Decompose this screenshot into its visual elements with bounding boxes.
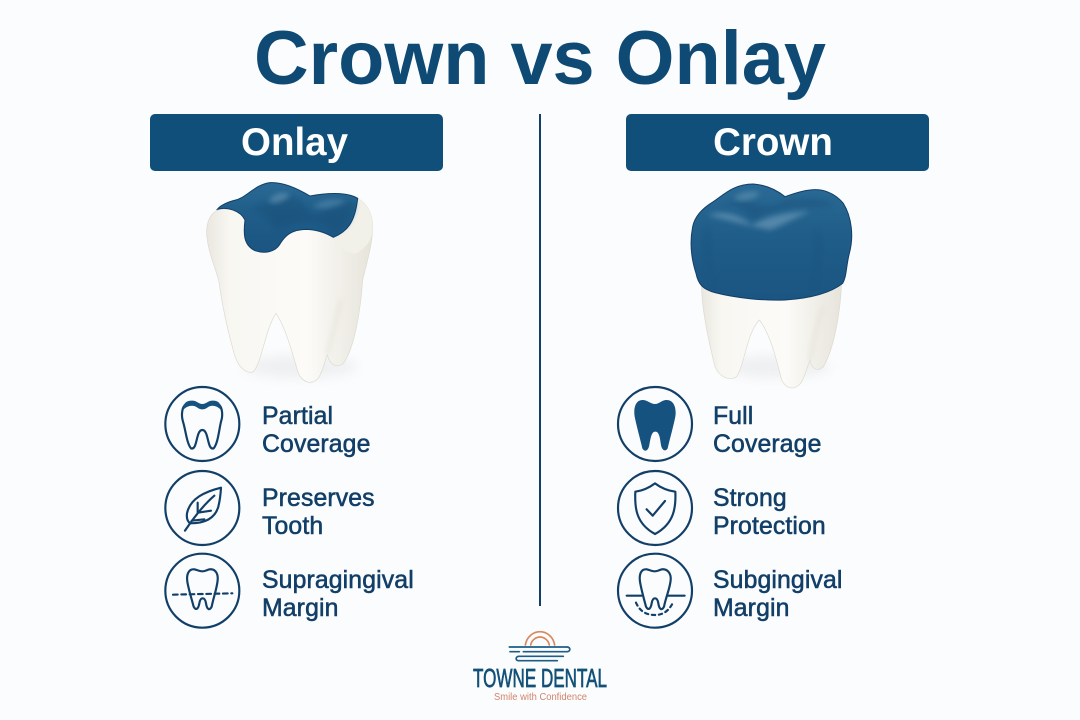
label: Strong: [713, 485, 787, 512]
feature: supragingival margin: [165, 554, 414, 628]
label: Margin: [262, 595, 339, 622]
label: Supragingival: [262, 567, 414, 594]
heading: crown: Crown: [713, 121, 833, 164]
label: Subgingival: [713, 567, 843, 594]
icon: tooth with gum line: [618, 554, 692, 628]
label: Coverage: [713, 431, 821, 458]
panel: onlay: [150, 114, 443, 628]
label: Protection: [713, 513, 826, 540]
divider: [539, 114, 541, 606]
tagline: Smile with Confidence: [494, 691, 587, 703]
heading: onlay: Onlay: [241, 121, 349, 164]
illustration: tooth with onlay: [207, 183, 373, 382]
icon: tooth above dashed margin: [165, 554, 239, 628]
label: Preserves: [262, 485, 375, 512]
feature: subgingival margin: [618, 554, 843, 628]
icon: partial coverage tooth: [165, 387, 239, 461]
icon: shield with check: [618, 471, 692, 545]
icon: leaf: [165, 471, 239, 545]
heading: onlay: [150, 114, 443, 171]
label: Coverage: [262, 431, 370, 458]
label: Tooth: [262, 513, 323, 540]
wordmark: TOWNE DENTAL: [473, 665, 607, 693]
logo mark: [509, 632, 570, 661]
feature: partial coverage: [165, 387, 370, 461]
logo: towne dental: [473, 632, 607, 703]
feature: full coverage: [618, 387, 821, 461]
icon: solid tooth: [618, 387, 692, 461]
heading: crown: [626, 114, 929, 171]
feature: preserves tooth: [165, 471, 375, 545]
label: Full: [713, 403, 753, 430]
title: Crown vs Onlay: [254, 16, 826, 101]
label: Partial: [262, 403, 333, 430]
panel: crown: [618, 114, 929, 628]
feature: strong protection: [618, 471, 826, 545]
illustration: tooth with crown: [691, 184, 852, 388]
label: Margin: [713, 595, 790, 622]
